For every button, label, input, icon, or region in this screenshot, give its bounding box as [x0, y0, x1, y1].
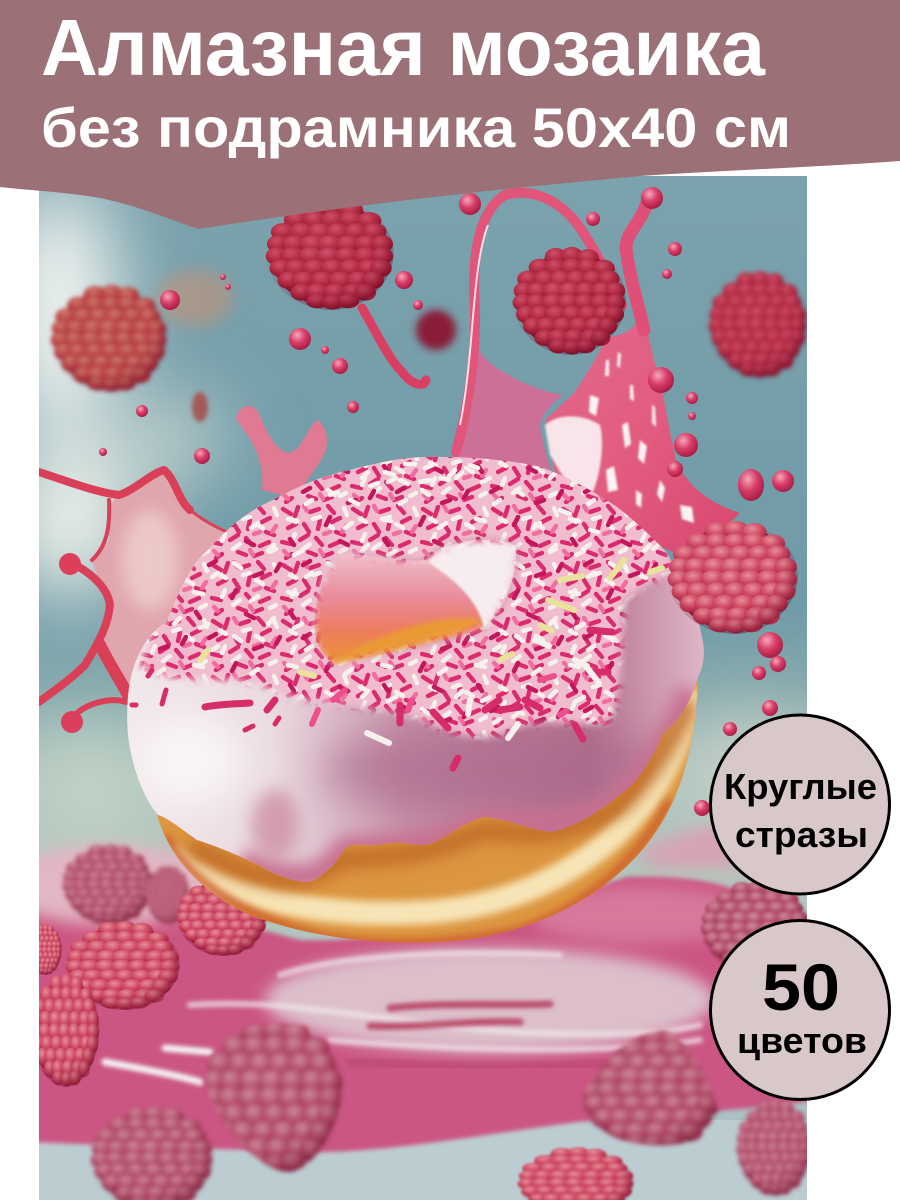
donut crust under icing: [190, 700, 690, 879]
splash: middle crown: [236, 406, 327, 498]
pink syrup on table: [30, 877, 815, 1152]
badge: round rhinestones: Круглые: [724, 766, 877, 807]
rippled reflection pool: [265, 948, 715, 1052]
photo: donut with raspberries: [0, 176, 820, 1200]
background light glow: [5, 180, 820, 850]
title line 1: Алмазная мозаика: [41, 3, 765, 92]
bottom wood surface: [39, 1120, 807, 1200]
donut icing: [127, 457, 704, 882]
badge: round rhinestones: стразы: [735, 814, 868, 855]
donut bottom edge: [165, 800, 670, 943]
crisp raspberry on donut right: [668, 521, 798, 634]
table ripples: [105, 953, 700, 1082]
crisp flying raspberries: [266, 199, 394, 310]
banner shape: [0, 0, 900, 229]
pale top sprinkle cluster: [330, 464, 598, 532]
sprinkles ring: [136, 456, 672, 742]
donut bread cream band: [172, 700, 690, 913]
splash: left sheet: [39, 467, 229, 733]
donut bread base: [156, 680, 698, 943]
out of focus foreground raspberries: [91, 1018, 811, 1200]
title line 2: без подрамника 50х40 см: [41, 96, 791, 159]
header banner: [0, 0, 900, 229]
splash: large pink arch and sheet: [453, 193, 740, 560]
splash: thin streak: [362, 308, 426, 384]
large loose sprinkles: [132, 560, 662, 768]
badge: round rhinestones: [710, 715, 890, 894]
dark blurred drop: [416, 310, 456, 350]
badge: 50 colours: 50: [762, 950, 840, 1024]
pink band behind donut: [639, 820, 740, 874]
table raspberries: [176, 877, 267, 956]
donut: [100, 420, 740, 943]
photo background sky: [39, 176, 807, 1200]
syrup droplets: [99, 187, 794, 816]
icing white near hole: [428, 540, 516, 628]
pink tone upper right: [530, 887, 750, 943]
donut hole: [315, 540, 516, 665]
badge: 50 colours: [710, 920, 890, 1100]
icing shading: [135, 690, 690, 878]
splash white highlights: [545, 352, 694, 523]
hole inner orange: [335, 619, 482, 665]
pale pink table left: [39, 838, 202, 934]
bottom raspberry: [518, 1147, 634, 1200]
badge: 50 colours: цветов: [737, 1020, 867, 1061]
background brown blur: [157, 270, 233, 326]
blurred raspberries behind: [51, 271, 807, 925]
